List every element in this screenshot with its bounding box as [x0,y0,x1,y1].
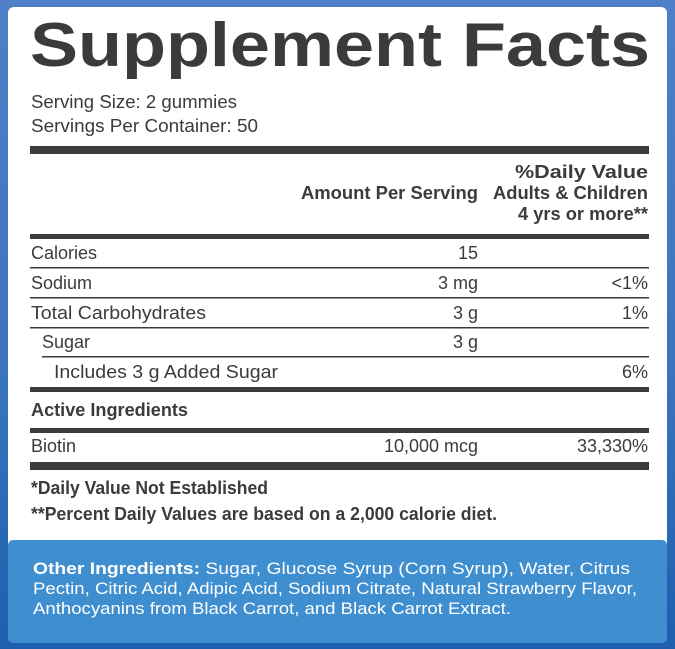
column headers: 4 yrs or more** [518,204,648,224]
other ingredients text: Anthocyanins from Black Carrot, and Black Carrot Extract. [33,600,511,618]
nutrient rows: 6% [622,362,648,382]
nutrient rows: <1% [611,273,648,293]
panel: other ingredients background [8,540,667,643]
nutrient rows: Sugar [42,332,90,352]
nutrient rows: Includes 3 g Added Sugar [54,362,278,382]
nutrient rows: 33,330% [577,436,648,456]
serving info: Servings Per Container: 50 [31,116,258,136]
column headers: Amount Per Serving [301,183,478,203]
other ingredients text [33,560,637,618]
nutrient rows: 3 g [453,303,478,323]
serving info [31,92,258,136]
footnotes: *Daily Value Not Established [31,478,268,498]
nutrient rows: Total Carbohydrates [31,303,206,323]
nutrient rows: 15 [458,243,478,263]
nutrient rows: Biotin [31,436,76,456]
footnotes: **Percent Daily Values are based on a 2,000 calorie diet. [31,504,497,524]
nutrient rows: 3 g [453,332,478,352]
nutrient rows [31,243,648,456]
column headers [301,162,648,224]
column headers: %Daily Value [515,162,648,182]
nutrient rows: Active Ingredients [31,400,188,420]
nutrient rows: Sodium [31,273,92,293]
other ingredients text: Other Ingredients: Sugar, Glucose Syrup (Corn Syrup), Water, Citrus [33,560,630,578]
other ingredients text: Pectin, Citric Acid, Adipic Acid, Sodium Citrate, Natural Strawberry Flavor, [33,580,637,598]
nutrient rows: Calories [31,243,97,263]
nutrient rows: 10,000 mcg [384,436,478,456]
nutrient rows: 1% [622,303,648,323]
column headers: Adults & Children [493,183,648,203]
serving info: Serving Size: 2 gummies [31,92,237,112]
nutrient rows: 3 mg [438,273,478,293]
title: Supplement Facts [30,11,650,80]
footnotes [31,478,497,524]
